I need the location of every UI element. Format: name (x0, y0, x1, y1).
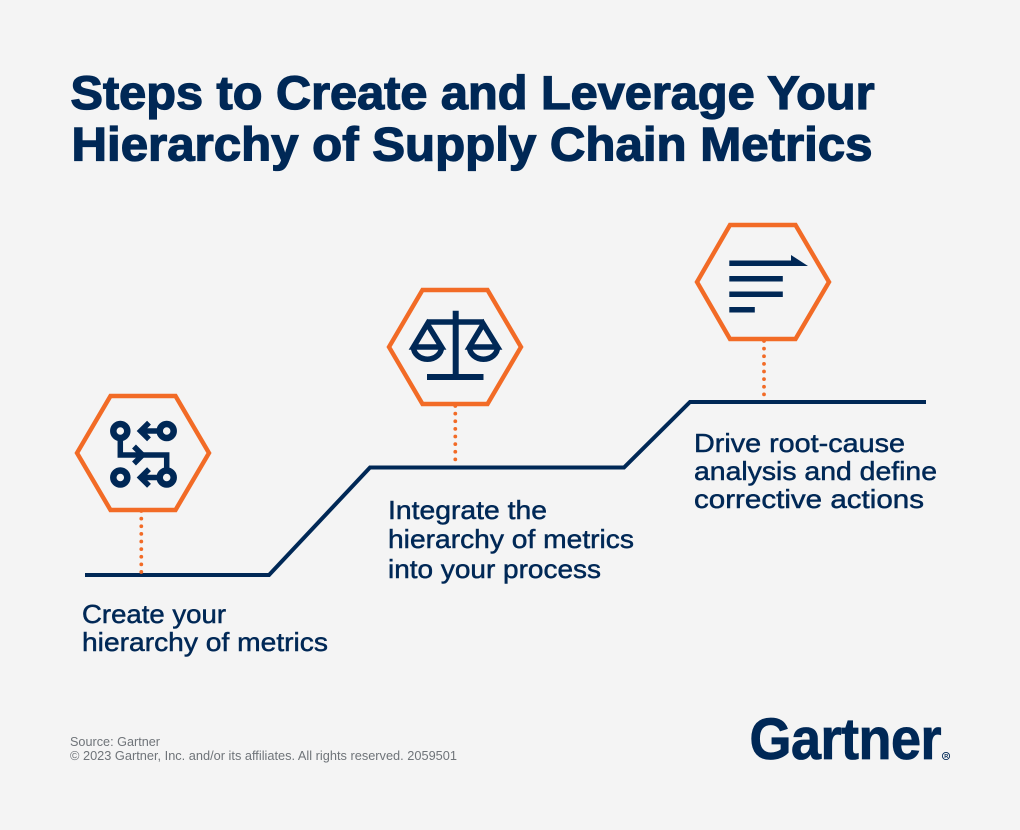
icon: lines with arrow (729, 255, 808, 312)
source and copyright: Source: Gartner (70, 735, 160, 749)
step 1 label: Create your (82, 599, 226, 629)
step 2 label: hierarchy of metrics (388, 524, 634, 554)
step 3 label: corrective actions (694, 484, 924, 514)
logo: Gartner: R (944, 754, 948, 760)
dotted connector: step 3 (762, 341, 766, 400)
hexagon: step 2 (389, 290, 521, 404)
hexagon: step 3 (697, 225, 829, 339)
logo: Gartner: Gartner (750, 706, 942, 772)
icon: balance scale (414, 311, 498, 377)
source and copyright: © 2023 Gartner, Inc. and/or its affiliates. All rights reserved. 2059501 (70, 749, 457, 763)
staircase line (85, 402, 926, 575)
step 3 label: Drive root-cause (694, 428, 905, 458)
step 2 label: into your process (388, 554, 601, 584)
title (70, 66, 874, 170)
step 3 label (694, 428, 937, 514)
step 2: integrate (388, 290, 634, 584)
icon: flow connectors (113, 423, 174, 486)
step 3 label: analysis and define (694, 456, 937, 486)
step 1 label: hierarchy of metrics (82, 627, 328, 657)
source and copyright (70, 735, 457, 763)
step 1: create hierarchy (77, 396, 328, 657)
hexagon: step 1 (77, 396, 209, 510)
title: Steps to Create and Leverage Your (70, 66, 874, 119)
step 2 label (388, 495, 634, 584)
step 2 label: Integrate the (388, 495, 547, 525)
dotted connector: step 2 (453, 406, 457, 466)
dotted connector: step 1 (139, 511, 143, 573)
step 1 label (82, 599, 328, 657)
step 3: root cause (694, 225, 937, 514)
title: Hierarchy of Supply Chain Metrics (72, 118, 873, 170)
